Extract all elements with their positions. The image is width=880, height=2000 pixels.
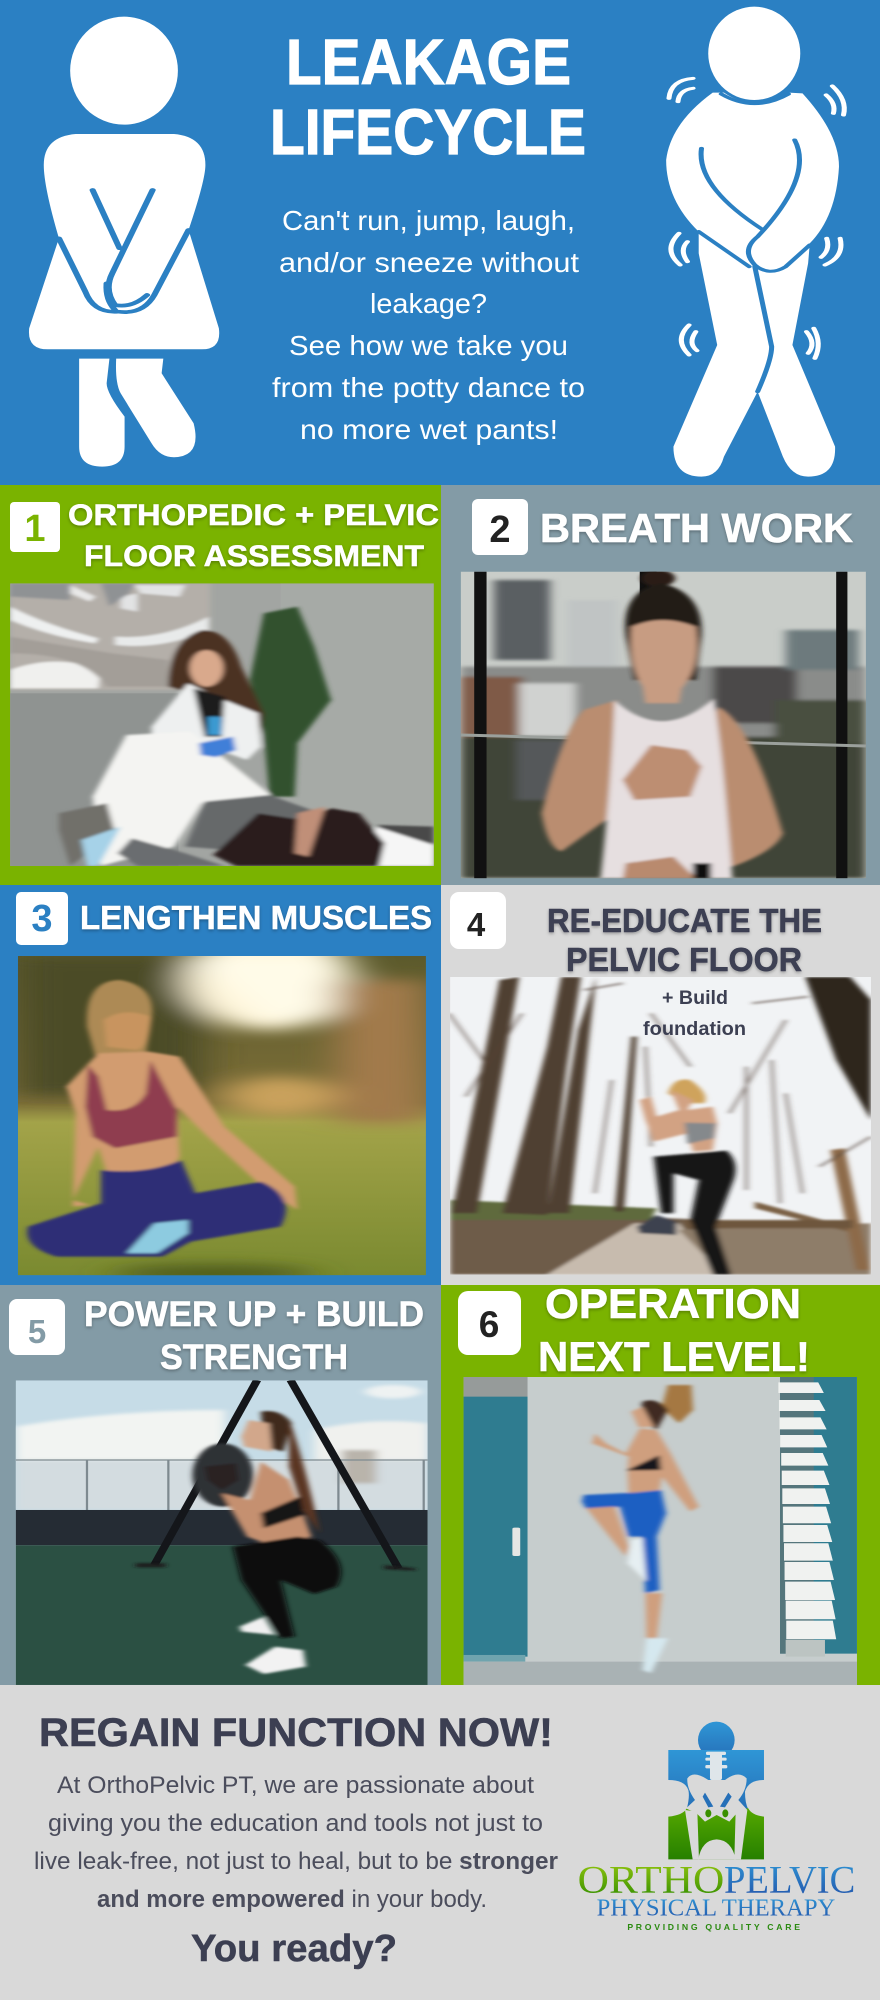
footer paragraph: and more empowered in your body. <box>97 1886 487 1913</box>
logo: OrthoPelvic Physical Therapy: PROVIDING QUALITY CARE <box>627 1922 800 1932</box>
badge 2: 2 <box>489 509 511 551</box>
intro text: leakage? <box>370 288 487 319</box>
heading 5 <box>84 1295 424 1377</box>
badge 4: 4 <box>467 906 486 943</box>
intro text: and/or sneeze without <box>279 247 579 278</box>
intro text: Can't run, jump, laugh, <box>282 205 575 236</box>
badge 3: 3 <box>31 898 53 940</box>
badge 5: 5 <box>28 1313 46 1350</box>
title: LEAKAGE <box>286 26 571 98</box>
heading 4: RE-EDUCATE THE <box>547 902 822 939</box>
title <box>270 26 586 168</box>
panel 5: power up <box>0 1285 441 1685</box>
logo wordmark: PHYSICAL THERAPY <box>597 1896 835 1922</box>
heading 6 <box>538 1280 810 1380</box>
header panel <box>0 0 880 485</box>
footer paragraph <box>34 1772 558 1913</box>
heading 1: FLOOR ASSESSMENT <box>84 540 424 573</box>
footer paragraph: live leak-free, not just to heal, but to be stronger <box>34 1848 558 1875</box>
photo: woman squatting with medicine ball <box>16 1380 428 1685</box>
photo caption: + Build <box>662 988 728 1009</box>
photo: clinician assessing patient <box>10 583 434 866</box>
panel 6: next level <box>441 1280 880 1685</box>
heading 4: PELVIC FLOOR <box>566 941 802 978</box>
badge 1: 1 <box>24 508 46 550</box>
badge 6 <box>458 1291 521 1355</box>
footer paragraph: giving you the education and tools not just to <box>48 1810 543 1837</box>
intro text: See how we take you <box>289 330 568 361</box>
logo: OrthoPelvic Physical Therapy <box>578 1722 855 1932</box>
panel 1: assessment <box>0 485 441 885</box>
badge 1 <box>10 502 60 552</box>
heading 2: BREATH WORK <box>540 505 853 551</box>
title: LIFECYCLE <box>270 96 586 168</box>
footer panel <box>0 1685 880 2000</box>
heading 1 <box>68 499 439 573</box>
footer paragraph: At OrthoPelvic PT, we are passionate about <box>57 1772 534 1799</box>
photo caption <box>643 988 746 1040</box>
heading 1: ORTHOPEDIC + PELVIC <box>68 499 439 532</box>
heading 6: NEXT LEVEL! <box>538 1333 810 1380</box>
heading 4 <box>547 902 822 978</box>
photo: woman step-up in park <box>449 977 871 1275</box>
icon: standing figure crossing legs <box>666 7 844 477</box>
logo wordmark <box>578 1858 855 1922</box>
heading 6: OPERATION <box>545 1280 801 1327</box>
panel 2: breath work <box>441 485 880 885</box>
heading 5: POWER UP + BUILD <box>84 1295 424 1334</box>
badge 2 <box>472 499 528 555</box>
photo caption: foundation <box>643 1019 746 1040</box>
photo: woman jumping against wall <box>464 1377 857 1685</box>
logo wordmark: PELVIC <box>724 1858 855 1902</box>
call to action: You ready? <box>191 1928 397 1970</box>
badge 3 <box>16 892 68 945</box>
panel 4: re-educate pelvic floor <box>441 885 880 1285</box>
badge 4 <box>450 892 506 949</box>
icon: woman in dress holding herself <box>29 17 219 467</box>
logo wordmark: ORTHO <box>578 1858 724 1902</box>
photo: woman breathing on balcony <box>461 570 866 878</box>
intro text: no more wet pants! <box>300 414 558 445</box>
heading 3: LENGTHEN MUSCLES <box>80 899 432 936</box>
intro text: from the potty dance to <box>272 372 585 403</box>
badge 6: 6 <box>479 1304 499 1345</box>
footer heading: REGAIN FUNCTION NOW! <box>39 1711 553 1755</box>
panel 3: lengthen muscles <box>0 885 441 1285</box>
intro text <box>272 205 585 445</box>
badge 5 <box>9 1299 65 1355</box>
heading 5: STRENGTH <box>160 1338 348 1377</box>
photo: woman stretching on grass <box>18 930 426 1282</box>
